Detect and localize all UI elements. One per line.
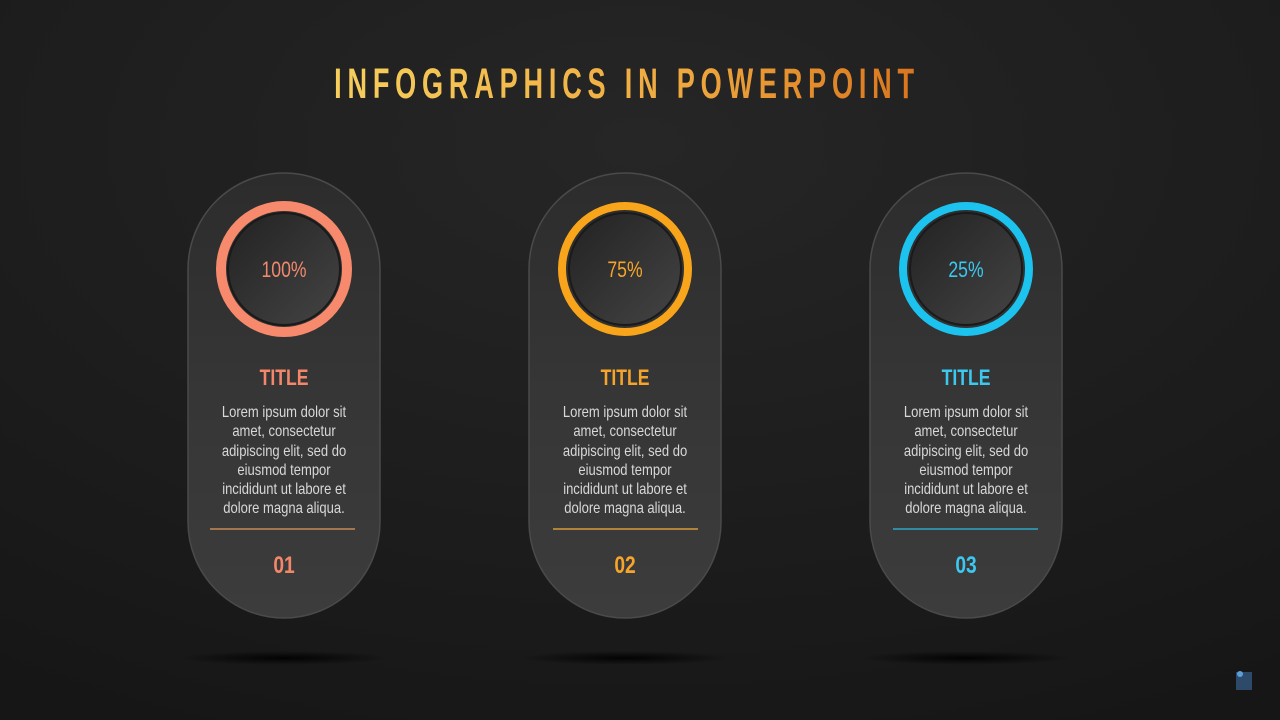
ring: 75%: 75%: [607, 258, 643, 283]
text block 1: amet, consectetur: [232, 423, 336, 440]
text block 2: amet, consectetur: [573, 423, 677, 440]
ring: 25%: [903, 206, 1029, 332]
ring: 100%: 100%: [262, 258, 306, 283]
text block 1: Lorem ipsum dolor sit: [222, 404, 346, 421]
text block 3: Lorem ipsum dolor sit: [904, 404, 1028, 421]
ring: 25%: 25%: [948, 258, 984, 283]
text block 2: eiusmod tempor: [578, 462, 672, 479]
heading: title 2: TITLE: [601, 366, 649, 391]
text block 1: [222, 404, 346, 517]
text block 1: incididunt ut labore et: [222, 481, 346, 498]
text block 2: [563, 404, 687, 517]
text block 1: dolore magna aliqua.: [223, 500, 345, 517]
text block 1: eiusmod tempor: [237, 462, 331, 479]
text block 3: adipiscing elit, sed do: [904, 443, 1028, 460]
ring: 100%: [221, 206, 347, 332]
number 03: 03: [955, 551, 977, 579]
heading: title 3: TITLE: [942, 366, 990, 391]
text block 2: Lorem ipsum dolor sit: [563, 404, 687, 421]
text block 3: amet, consectetur: [914, 423, 1018, 440]
number 02: 02: [614, 551, 636, 579]
text block 3: incididunt ut labore et: [904, 481, 1028, 498]
ring: 75%: [562, 206, 688, 332]
text block 2: adipiscing elit, sed do: [563, 443, 687, 460]
text block 3: dolore magna aliqua.: [905, 500, 1027, 517]
panel: card 3: [861, 173, 1071, 665]
heading: title 1: TITLE: [260, 366, 308, 391]
text block 1: adipiscing elit, sed do: [222, 443, 346, 460]
number 01: 01: [273, 551, 295, 579]
text block 3: [904, 404, 1028, 517]
title: INFOGRAPHICS IN POWERPOINT: [334, 60, 920, 108]
panel: card 2: [520, 173, 730, 665]
text block 2: dolore magna aliqua.: [564, 500, 686, 517]
text block 3: eiusmod tempor: [919, 462, 1013, 479]
text block 2: incididunt ut labore et: [563, 481, 687, 498]
icon: logo: [1236, 671, 1252, 690]
panel: card 1: [179, 173, 389, 665]
